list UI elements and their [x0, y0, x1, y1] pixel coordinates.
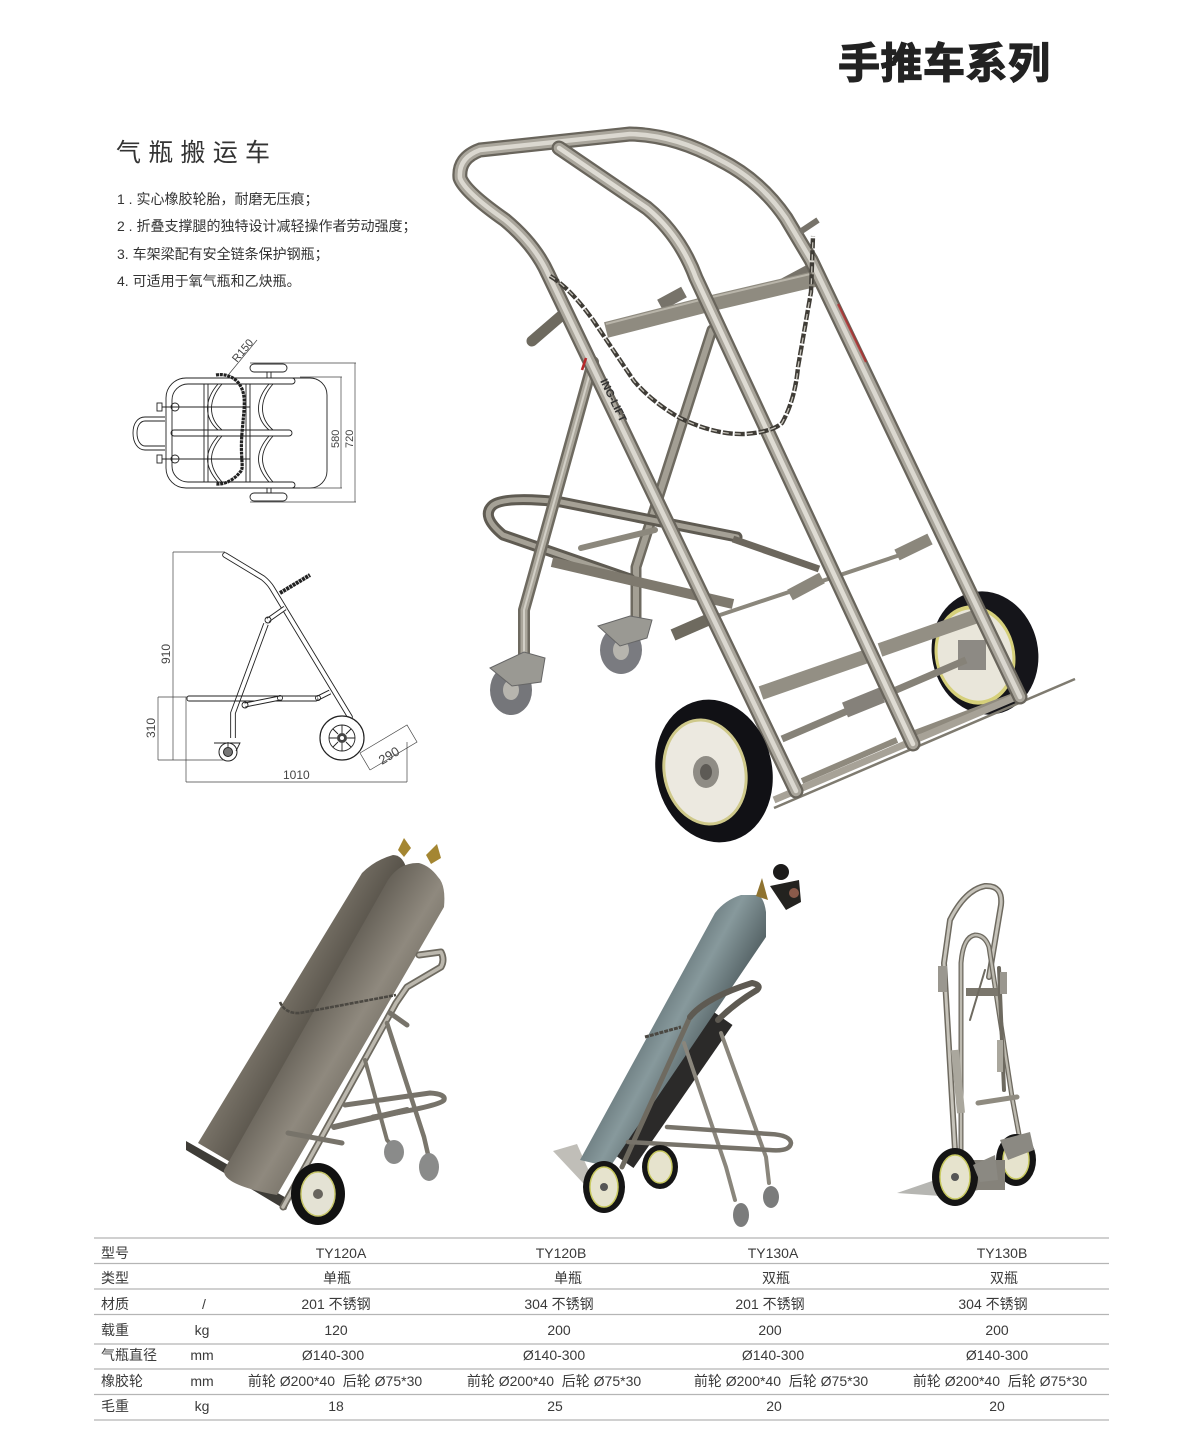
- folding lower frame: [488, 500, 819, 604]
- side view technical drawing: 290: [376, 744, 402, 768]
- casters: [1000, 1132, 1034, 1160]
- main hand truck photo: [460, 134, 1075, 854]
- casters: [733, 1203, 749, 1227]
- row: material: 201 不锈钢: [735, 1296, 805, 1312]
- row: rubber wheels: 前轮 Ø200*40 后轮 Ø75*30: [694, 1373, 868, 1389]
- tubes: [944, 886, 1020, 1150]
- base plate: [553, 1144, 592, 1183]
- row: gross weight: kg: [195, 1398, 209, 1414]
- side view technical drawing: 910: [159, 644, 173, 664]
- feature list: 4. 可适用于氧气瓶和乙炔瓶。: [117, 273, 301, 289]
- row: cylinder diameter: Ø140-300: [302, 1347, 364, 1363]
- row: cylinder diameter: [101, 1347, 1028, 1363]
- row: gross weight: 20: [989, 1398, 1005, 1414]
- row: material: 材质: [101, 1296, 129, 1312]
- row: type: 双瓶: [762, 1270, 790, 1286]
- row: gross weight: [101, 1398, 1005, 1414]
- row: type: 单瓶: [323, 1270, 351, 1286]
- row: cylinder diameter: Ø140-300: [742, 1347, 804, 1363]
- row: material: 201 不锈钢: [301, 1296, 371, 1312]
- rear wheel: [320, 716, 364, 760]
- row: material: /: [202, 1296, 206, 1312]
- title: 手推车系列: [838, 40, 1050, 87]
- rods: [532, 316, 930, 635]
- specification table: [94, 1238, 1109, 1420]
- row: gross weight: 25: [547, 1398, 563, 1414]
- rear legs: [636, 330, 712, 618]
- row: load: [101, 1322, 1009, 1338]
- feature list: 3. 车架梁配有安全链条保护钢瓶；: [117, 246, 329, 263]
- rear dark tube: [622, 1017, 721, 1160]
- cylinder: [580, 895, 766, 1167]
- side view technical drawing: 310: [144, 718, 158, 738]
- row: load: 200: [547, 1322, 571, 1338]
- wheels: [996, 1134, 1036, 1186]
- row: rubber wheels: mm: [190, 1373, 214, 1389]
- frame: [283, 952, 444, 1207]
- row: gross weight: 20: [766, 1398, 782, 1414]
- row: model: 型号: [101, 1245, 129, 1261]
- feature list: [117, 191, 416, 289]
- row: load: kg: [195, 1322, 209, 1338]
- row: model: [101, 1245, 1027, 1261]
- feature list: 1 . 实心橡胶轮胎，耐磨无压痕；: [117, 191, 318, 208]
- base plate: [897, 1180, 995, 1197]
- brand label on tube: [582, 304, 866, 424]
- product heading: 气瓶搬运车: [116, 139, 270, 167]
- row: load: 载重: [101, 1322, 129, 1338]
- row: type: 单瓶: [554, 1270, 582, 1286]
- main tube frame: [460, 134, 1020, 791]
- brand label on tube: ING-LIFT: [597, 377, 629, 424]
- row: rubber wheels: 前轮 Ø200*40 后轮 Ø75*30: [248, 1373, 422, 1389]
- casters: [384, 1140, 404, 1164]
- lower straps: [761, 614, 983, 693]
- front wheel: [641, 688, 787, 854]
- wheel: [291, 1163, 345, 1225]
- side view technical drawing: [144, 552, 417, 782]
- hinge plates: [938, 966, 947, 992]
- rear cylinder: [198, 855, 406, 1163]
- row: load: 120: [324, 1322, 348, 1338]
- photo: folded hand truck: [897, 886, 1036, 1206]
- row: cylinder diameter: 气瓶直径: [101, 1347, 157, 1363]
- row: gross weight: 毛重: [101, 1398, 129, 1414]
- chain: [280, 995, 396, 1013]
- front cylinder: [224, 863, 444, 1195]
- row: material: 304 不锈钢: [958, 1296, 1028, 1312]
- rear wheel: [920, 581, 1050, 725]
- regulator: [773, 864, 789, 880]
- row: cylinder diameter: Ø140-300: [523, 1347, 585, 1363]
- top view technical drawing: 720: [344, 430, 356, 448]
- feature list: 2 . 折叠支撑腿的独特设计减轻操作者劳动强度；: [117, 218, 416, 235]
- front leg: [524, 362, 593, 656]
- photo: single cylinder trolley: [553, 864, 801, 1227]
- row: gross weight: 18: [328, 1398, 344, 1414]
- caster: [219, 743, 237, 761]
- row: type: [101, 1270, 1018, 1286]
- row: model: TY120B: [536, 1245, 586, 1261]
- row: material: [101, 1296, 1028, 1312]
- chain in top view: [216, 375, 244, 484]
- top view technical drawing: [133, 337, 356, 502]
- row: rubber wheels: 前轮 Ø200*40 后轮 Ø75*30: [467, 1373, 641, 1389]
- safety chain: [550, 220, 818, 434]
- legs and handle: [622, 983, 791, 1200]
- row: rubber wheels: [101, 1373, 1087, 1389]
- row: material: 304 不锈钢: [524, 1296, 594, 1312]
- photo: double cylinder trolley: [186, 838, 444, 1225]
- base plate: [186, 1141, 290, 1210]
- row: type: 双瓶: [990, 1270, 1018, 1286]
- casters: [490, 616, 652, 715]
- side view technical drawing: 1010: [283, 768, 310, 782]
- wheels: [642, 1145, 678, 1189]
- row: model: TY130B: [977, 1245, 1027, 1261]
- row: load: 200: [985, 1322, 1009, 1338]
- row: model: TY120A: [316, 1245, 367, 1261]
- row: load: 200: [758, 1322, 782, 1338]
- row: cylinder diameter: Ø140-300: [966, 1347, 1028, 1363]
- row: type: 类型: [101, 1270, 129, 1286]
- row: rubber wheels: 前轮 Ø200*40 后轮 Ø75*30: [913, 1373, 1087, 1389]
- row: cylinder diameter: mm: [190, 1347, 214, 1363]
- top view technical drawing: 580: [330, 430, 342, 448]
- valves: [398, 838, 411, 857]
- chain: [645, 1027, 681, 1037]
- row: model: TY130A: [748, 1245, 799, 1261]
- top cross strap: [606, 270, 819, 330]
- row: rubber wheels: 橡胶轮: [101, 1373, 143, 1389]
- axle and base plate: [774, 660, 1075, 808]
- top view technical drawing: R150: [230, 337, 256, 365]
